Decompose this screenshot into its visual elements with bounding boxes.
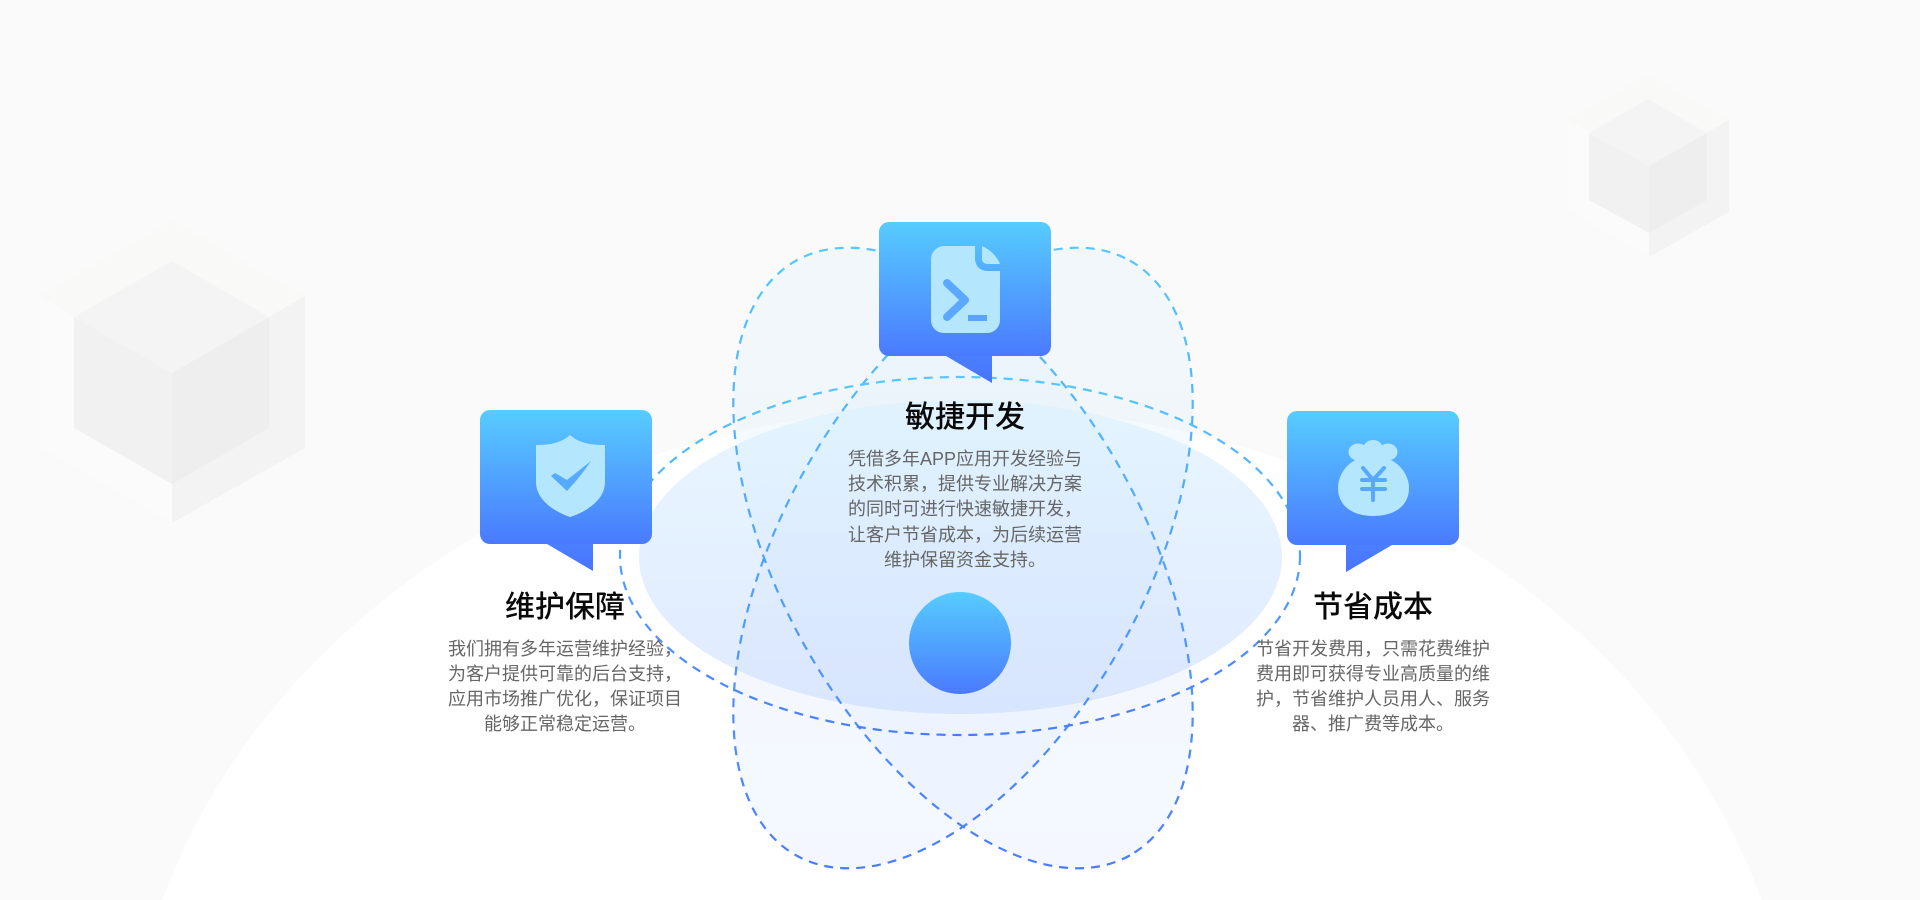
description: cost saving: 费用即可获得专业高质量的维 — [1256, 664, 1490, 684]
orbit outline tilted right — [638, 172, 1288, 900]
description: agile development: 技术积累，提供专业解决方案 — [848, 474, 1082, 494]
orbit fill tilted left — [638, 172, 1288, 900]
heading: cost saving: 节省成本 — [1313, 590, 1433, 624]
orbit outline tilted left — [638, 172, 1288, 900]
text block: cost saving — [1256, 590, 1490, 734]
decorative cube left — [39, 220, 305, 523]
orbit outline horizontal — [620, 377, 1300, 735]
icon: code document bubble — [879, 222, 1051, 383]
background white dome — [162, 407, 1762, 900]
description: agile development: 让客户节省成本，为后续运营 — [848, 525, 1082, 545]
description: maintenance: 为客户提供可靠的后台支持， — [448, 664, 682, 684]
description: maintenance: 我们拥有多年运营维护经验， — [448, 639, 682, 659]
icon: money bag bubble — [1287, 411, 1459, 572]
central gradient circle — [909, 592, 1011, 694]
description: cost saving: 护，节省维护人员用人、服务 — [1256, 689, 1490, 709]
description: cost saving: 器、推广费等成本。 — [1292, 714, 1454, 734]
icon: shield bubble — [480, 410, 652, 571]
text block: agile development — [848, 400, 1082, 570]
description: maintenance: 应用市场推广优化，保证项目 — [448, 689, 682, 709]
description: cost saving — [1256, 639, 1490, 734]
text block: maintenance — [448, 590, 682, 734]
description: cost saving: 节省开发费用，只需花费维护 — [1256, 639, 1490, 659]
description: maintenance: 能够正常稳定运营。 — [484, 714, 646, 734]
orbit fill tilted right — [638, 172, 1288, 900]
central soft ellipse — [639, 400, 1282, 714]
description: maintenance — [448, 639, 682, 734]
heading: maintenance: 维护保障 — [505, 590, 625, 624]
decorative cube right — [1568, 74, 1729, 257]
description: agile development: 凭借多年APP应用开发经验与 — [848, 448, 1082, 468]
description: agile development: 的同时可进行快速敏捷开发， — [848, 499, 1082, 519]
heading: agile development: 敏捷开发 — [905, 400, 1025, 434]
description: agile development — [848, 448, 1082, 570]
description: agile development: 维护保留资金支持。 — [884, 550, 1046, 570]
